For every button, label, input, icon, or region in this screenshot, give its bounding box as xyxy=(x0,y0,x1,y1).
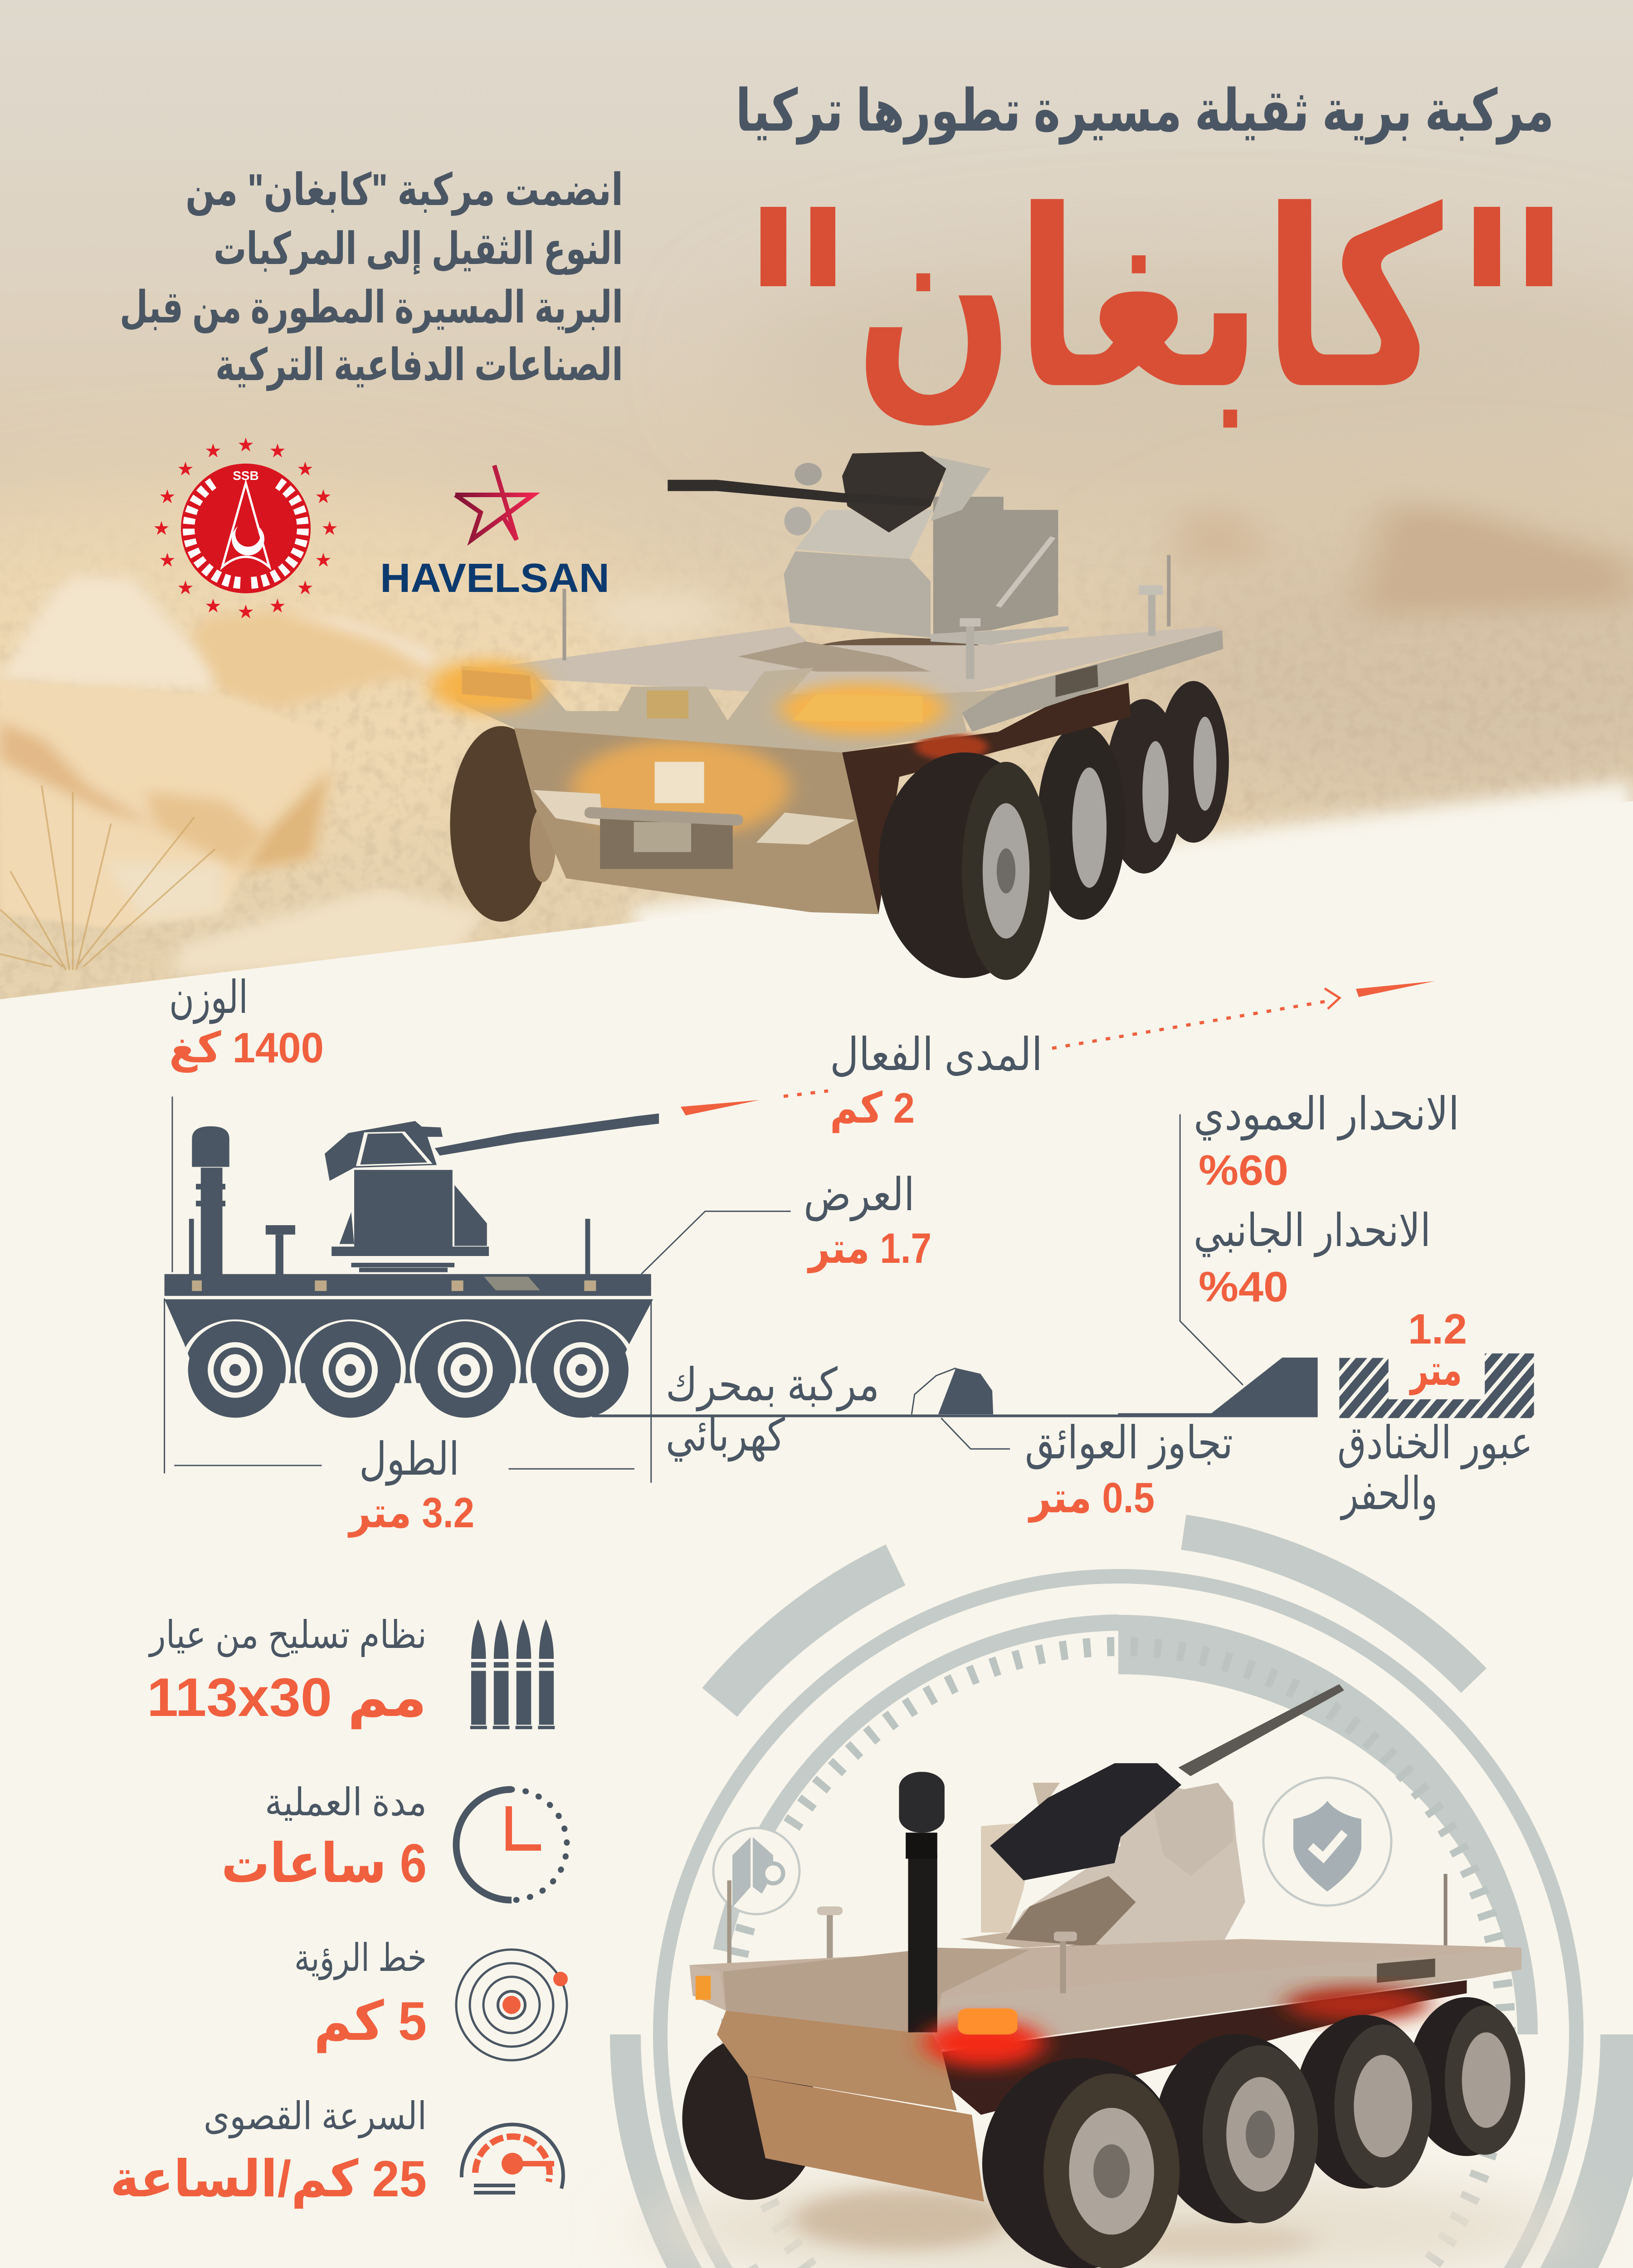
headline name: كابغان xyxy=(854,164,1445,437)
spec: effective range: 2 كم xyxy=(830,1084,915,1133)
logo: SSB emblem: ★ xyxy=(297,458,314,479)
stat: operation time: مدة العملية xyxy=(265,1781,427,1823)
spec: trench crossing: عبور الخنادق xyxy=(1337,1418,1533,1469)
shield badge in ring xyxy=(1263,1778,1391,1906)
logo: Havelsan: HAVELSAN xyxy=(380,556,609,601)
logo: SSB emblem: ★ xyxy=(321,518,338,539)
logo: SSB emblem: ★ xyxy=(315,549,332,571)
spec: vertical slope xyxy=(1194,1089,1459,1194)
stat: armament xyxy=(147,1613,427,1730)
rear wheel xyxy=(682,2037,818,2200)
near rocks xyxy=(0,575,219,690)
turret xyxy=(981,1822,1036,1932)
logo: SSB emblem xyxy=(153,434,338,622)
headlights xyxy=(431,660,546,713)
spec: width: العرض xyxy=(804,1169,915,1222)
spec: trench crossing: والحفر xyxy=(1340,1468,1438,1520)
spec: effective range: المدى الفعال xyxy=(830,1029,1043,1080)
stat: operation time: 6 ساعات xyxy=(221,1833,427,1894)
spec: electric engine: كهربائي xyxy=(666,1410,785,1462)
tail light xyxy=(1060,1937,1066,1993)
decorative target rings xyxy=(625,1532,1626,2268)
intro paragraph: انضمت مركبة "كابغان" من xyxy=(185,165,623,216)
stat: armament: نظام تسليح من عيار xyxy=(148,1613,427,1657)
deck xyxy=(459,626,1223,702)
side view vehicle diagram xyxy=(165,1114,659,1420)
spec: trench crossing: متر xyxy=(1409,1346,1462,1395)
spec: electric engine: مركبة بمحرك xyxy=(666,1359,879,1411)
rear wheels xyxy=(1158,681,1229,843)
spec: side slope xyxy=(1194,1205,1431,1310)
spec: length: الطول xyxy=(359,1434,459,1486)
stat: top speed xyxy=(110,2095,427,2209)
hero vehicle xyxy=(431,452,1229,980)
stat: top speed: 25 كم/الساعة xyxy=(110,2151,427,2209)
logo: SSB emblem: ★ xyxy=(159,486,176,507)
left wheel xyxy=(450,726,552,922)
spec: width xyxy=(804,1169,931,1273)
spec: electric engine xyxy=(666,1359,879,1462)
logo: SSB emblem: ★ xyxy=(269,595,286,616)
logo: SSB emblem: SSB xyxy=(233,469,259,483)
stat: line of sight xyxy=(294,1936,427,2053)
logo: SSB emblem: ★ xyxy=(177,577,194,598)
spec: vertical slope: الانحدار العمودي xyxy=(1194,1089,1459,1140)
spec: weight xyxy=(169,972,324,1073)
logo: SSB emblem: ★ xyxy=(159,549,176,571)
logo: SSB emblem: ★ xyxy=(297,577,314,598)
dimension and leader lines xyxy=(165,1097,1318,1483)
spec: side slope: %40 xyxy=(1199,1263,1288,1310)
spec: weight: الوزن xyxy=(169,972,248,1024)
stat: top speed: السرعة القصوى xyxy=(204,2095,427,2139)
logo: SSB emblem: ★ xyxy=(153,518,170,539)
intro paragraph: البرية المسيرة المطورة من قبل xyxy=(120,282,623,333)
masts xyxy=(562,589,566,660)
hull side shadow xyxy=(842,683,1131,914)
stat: operation time xyxy=(221,1781,427,1894)
soft dust edge of the photo xyxy=(635,801,1633,928)
logo: SSB emblem: ★ xyxy=(205,440,222,461)
hull xyxy=(941,1980,1467,2115)
logo: Havelsan xyxy=(380,465,609,601)
deck xyxy=(690,1939,1521,2050)
stat icon: radar xyxy=(456,1950,568,2060)
stat: line of sight: خط الرؤية xyxy=(294,1936,427,1980)
hero photo: desert scene xyxy=(0,0,1633,1043)
stat icon: clock xyxy=(456,1789,567,1900)
spec: obstacle xyxy=(1025,1418,1233,1523)
intro paragraph xyxy=(120,165,623,391)
map badge in ring xyxy=(713,1828,799,1914)
stat icon: bullets xyxy=(470,1619,555,1729)
poles xyxy=(727,1880,731,1967)
ground dust xyxy=(647,2171,1570,2268)
spec: trench crossing: 1.2 xyxy=(1408,1305,1467,1353)
range projectiles and dotted line xyxy=(681,981,1435,1115)
hull front xyxy=(514,728,878,914)
spec: obstacle: 0.5 متر xyxy=(1028,1474,1155,1523)
spec: width: 1.7 متر xyxy=(807,1224,931,1273)
spec: weight: 1400 كغ xyxy=(169,1024,324,1073)
spec: length xyxy=(347,1434,474,1538)
spec: vertical slope: %60 xyxy=(1199,1146,1288,1194)
logo: SSB emblem: ★ xyxy=(237,601,254,622)
turret xyxy=(784,551,931,638)
spec: length: 3.2 متر xyxy=(347,1489,474,1538)
turret base xyxy=(807,638,992,668)
intro paragraph: النوع الثقيل إلى المركبات xyxy=(214,224,623,275)
spec: trench crossing xyxy=(1337,1305,1533,1520)
wheel front xyxy=(878,753,1050,978)
spec: obstacle: تجاوز العوائق xyxy=(1025,1418,1233,1470)
logo: SSB emblem: ★ xyxy=(269,440,286,461)
intro paragraph: الصناعات الدفاعية التركية xyxy=(215,340,623,391)
central vehicle xyxy=(647,1684,1570,2268)
stat icon: speedometer xyxy=(462,2125,563,2193)
spec: effective range xyxy=(830,1029,1043,1133)
stat: line of sight: 5 كم xyxy=(314,1991,427,2053)
stat: armament: 113x30 مم xyxy=(147,1667,427,1730)
far rocks xyxy=(1354,503,1633,617)
mast xyxy=(908,1854,937,2032)
logo: SSB emblem: ★ xyxy=(315,486,332,507)
logo: SSB emblem: ★ xyxy=(237,434,254,455)
logo: SSB emblem: ★ xyxy=(177,458,194,479)
spec: side slope: الانحدار الجانبي xyxy=(1194,1205,1431,1257)
logo: SSB emblem: ★ xyxy=(205,595,222,616)
terrain icons: rock, slope, trench xyxy=(912,1354,1534,1418)
wheels xyxy=(1409,1997,1525,2156)
